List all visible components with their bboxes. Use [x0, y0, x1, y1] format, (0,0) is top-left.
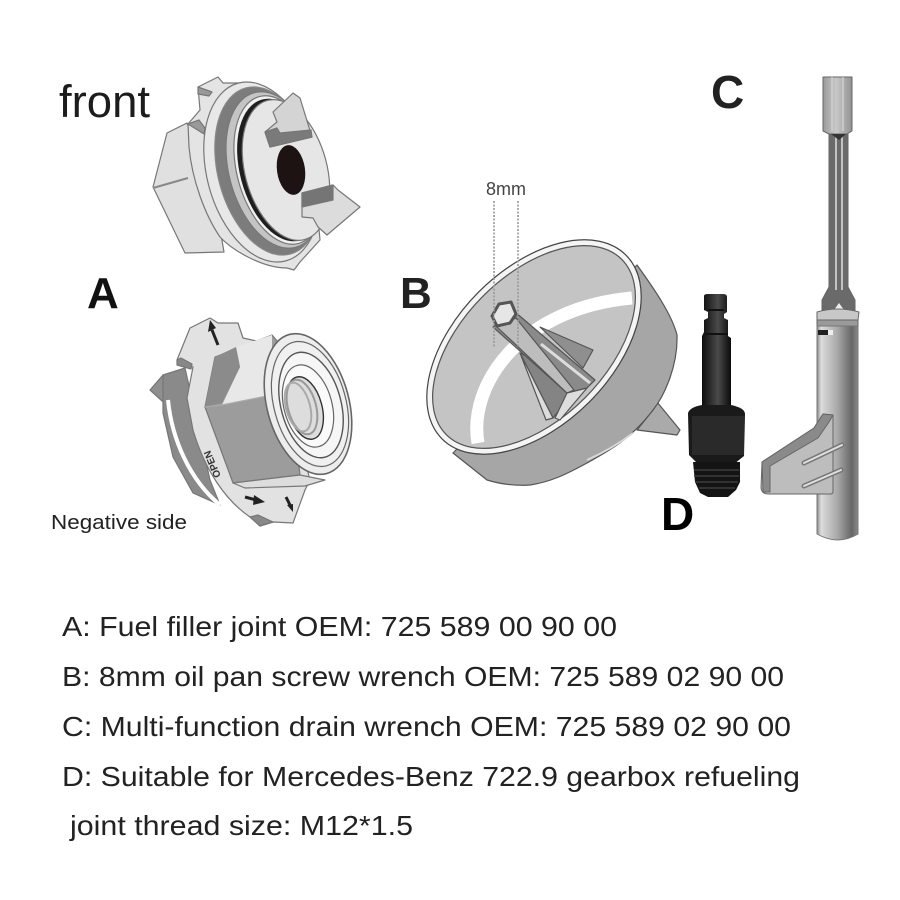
icon: refueling joint [688, 294, 745, 497]
text block: part descriptions: D: Suitable for Mercedes-Benz 722.9 gearbox refueling [62, 761, 800, 792]
dimension: 8mm: 8mm [486, 179, 526, 199]
dimension: 8mm [486, 179, 526, 347]
icon: multi-function drain wrench [761, 77, 859, 540]
icon: fuel filler joint front view [153, 69, 360, 275]
text block: part descriptions [62, 611, 800, 841]
text block: part descriptions: B: 8mm oil pan screw wrench OEM: 725 589 02 90 00 [62, 661, 784, 692]
text block: part descriptions: A: Fuel filler joint OEM: 725 589 00 90 00 [62, 611, 617, 642]
icon: oil pan screw wrench [387, 200, 681, 494]
text block: part descriptions: joint thread size: M12*1.5 [69, 810, 413, 841]
label: C: C [711, 66, 744, 118]
heading: front: front [59, 76, 150, 127]
label: B: B [400, 269, 432, 318]
text block: part descriptions: C: Multi-function drain wrench OEM: 725 589 02 90 00 [62, 711, 791, 742]
label: D: D [661, 488, 694, 540]
icon: fuel filler joint negative side [150, 318, 366, 526]
engraved text: OPEN: OPEN [203, 449, 224, 479]
label: A: A [87, 269, 119, 318]
caption: Negative side: Negative side [51, 512, 187, 534]
